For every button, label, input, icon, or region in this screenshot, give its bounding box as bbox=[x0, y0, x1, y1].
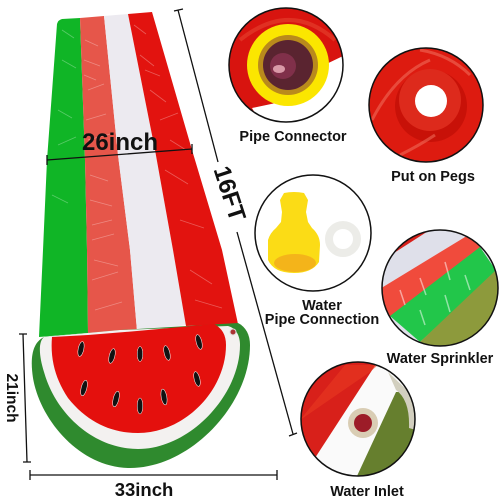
red flesh bbox=[52, 324, 226, 433]
icon: yellow nut bbox=[247, 24, 329, 106]
dimension: 26inch: 26inch bbox=[82, 129, 158, 156]
detail: water inlet bbox=[300, 361, 420, 477]
detail: put on pegs bbox=[369, 48, 483, 162]
label: put on pegs: Put on Pegs bbox=[391, 169, 475, 185]
light red stripe bbox=[80, 16, 137, 335]
white stripe bbox=[104, 14, 186, 331]
grommet bbox=[230, 329, 236, 335]
dimension: 16FT: 16FT bbox=[208, 163, 251, 225]
label: water pipe connection: Pipe Connection bbox=[265, 312, 379, 328]
dimension: 33inch bbox=[30, 470, 277, 500]
icon: white washer bbox=[329, 225, 357, 253]
dimension: 21inch bbox=[3, 334, 31, 462]
plastic wrinkles bbox=[52, 25, 222, 310]
watermelon end pool bbox=[32, 323, 250, 468]
detail: water pipe connection bbox=[255, 175, 371, 291]
green stripe bbox=[39, 18, 88, 337]
label: pipe connector: Pipe Connector bbox=[239, 129, 347, 145]
dimension: 26inch bbox=[47, 129, 192, 165]
dimension: 16FT bbox=[174, 9, 297, 436]
dimension: 21inch: 21inch bbox=[3, 373, 20, 423]
white rind bbox=[40, 326, 240, 449]
green rim bbox=[32, 323, 250, 468]
label: water sprinkler: Water Sprinkler bbox=[387, 351, 494, 367]
water slide mat bbox=[39, 12, 238, 337]
label: water pipe connection: Water bbox=[302, 298, 342, 314]
icon: yellow adapter bbox=[268, 192, 320, 273]
seeds bbox=[77, 334, 204, 414]
label: water pipe connection bbox=[265, 298, 379, 328]
detail: water sprinkler bbox=[378, 226, 500, 350]
dimension: 33inch: 33inch bbox=[115, 479, 173, 500]
detail: pipe connector bbox=[229, 8, 345, 130]
label: water inlet: Water Inlet bbox=[330, 484, 404, 500]
red stripe bbox=[128, 12, 238, 326]
